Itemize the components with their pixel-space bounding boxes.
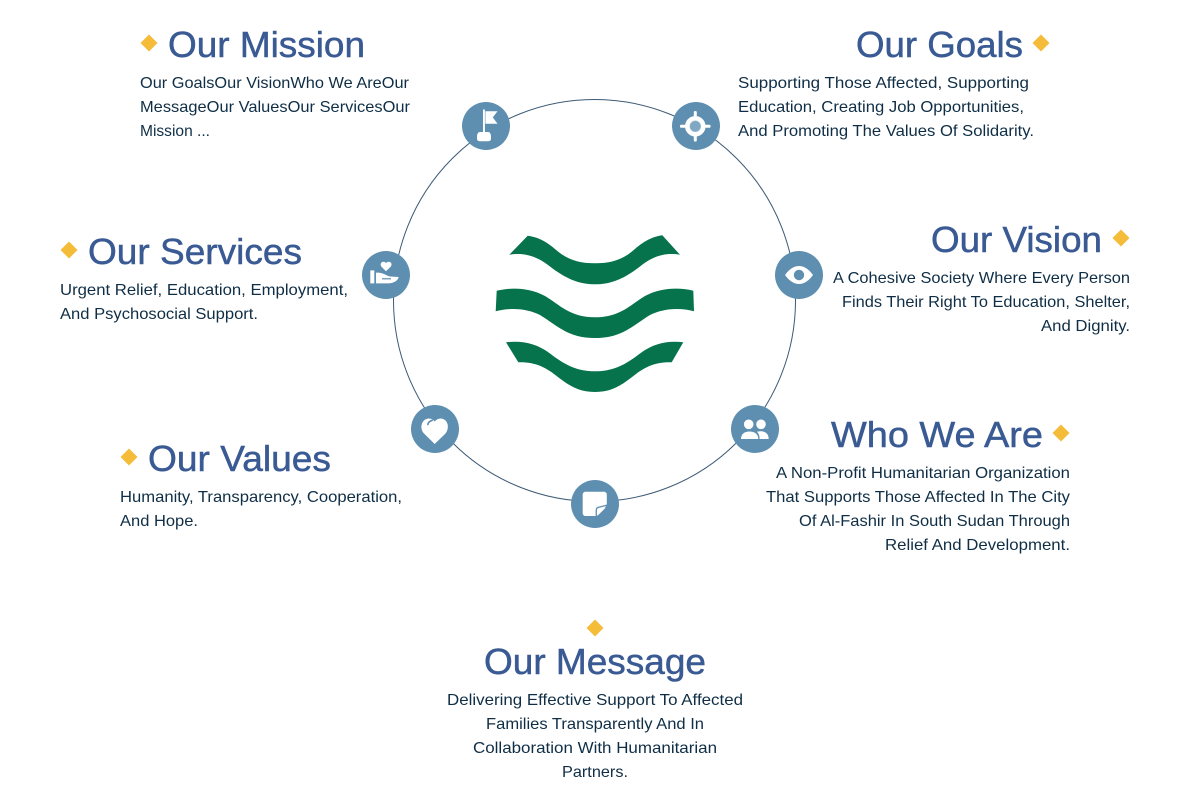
body text: Delivering Effective Support To Affected: [447, 692, 743, 709]
section: our services: [60, 231, 348, 323]
heading: Our Services: [88, 231, 302, 272]
body text: Of Al-Fashir In South Sudan Through: [799, 513, 1070, 530]
body text: And Promoting The Values Of Solidarity.: [738, 123, 1034, 140]
diamond marker: [586, 620, 604, 636]
body text: Partners.: [562, 764, 628, 781]
body text: Supporting Those Affected, Supporting: [738, 75, 1029, 92]
heading: Who We Are: [831, 414, 1043, 455]
body text: Relief And Development.: [885, 537, 1070, 554]
body text: Finds Their Right To Education, Shelter,: [842, 294, 1130, 311]
icon: who we are people: [731, 405, 779, 453]
body text: [120, 489, 402, 530]
diamond marker: [1052, 424, 1070, 442]
body text: [60, 282, 348, 323]
icon: vision eye: [775, 251, 823, 299]
body text: [766, 465, 1070, 554]
body text: And Dignity.: [1041, 318, 1130, 335]
diamond marker: [60, 242, 78, 258]
logo: three green waves: [496, 235, 694, 392]
body text: [140, 75, 411, 140]
diamond marker: [1032, 34, 1050, 52]
body text: Families Transparently And In: [486, 716, 704, 733]
section: who we are: [766, 414, 1070, 554]
body text: Urgent Relief, Education, Employment,: [60, 282, 348, 299]
heading: Our Vision: [931, 219, 1102, 260]
icon: services hand with heart: [362, 251, 410, 299]
body text: Humanity, Transparency, Cooperation,: [120, 489, 402, 506]
body text: Mission ...: [140, 123, 210, 140]
heading: Our Goals: [856, 24, 1023, 65]
body text: [738, 75, 1034, 140]
diamond marker: [140, 34, 158, 52]
diamond marker: [120, 448, 138, 466]
heading: Our Message: [484, 641, 706, 682]
body text: [833, 270, 1130, 335]
body text: Collaboration With Humanitarian: [473, 740, 717, 757]
body text: Education, Creating Job Opportunities,: [738, 99, 1024, 116]
icon: message note: [571, 480, 619, 528]
body text: MessageOur ValuesOur ServicesOur: [140, 99, 411, 116]
body text: And Psychosocial Support.: [60, 306, 258, 323]
icon: goals target: [672, 102, 720, 150]
section: our vision: [833, 219, 1130, 335]
body text: A Cohesive Society Where Every Person: [833, 270, 1130, 287]
section: our goals: [738, 24, 1050, 140]
body text: A Non-Profit Humanitarian Organization: [776, 465, 1070, 482]
section: our mission: [140, 24, 411, 140]
icon: mission flag: [462, 102, 510, 150]
icon: values heart: [411, 405, 459, 453]
body text: [447, 692, 743, 781]
diamond marker: [1112, 230, 1130, 246]
body text: And Hope.: [120, 513, 198, 530]
body text: Our GoalsOur VisionWho We AreOur: [140, 75, 410, 92]
heading: Our Values: [148, 438, 331, 479]
body text: That Supports Those Affected In The City: [766, 489, 1070, 506]
section: our message: [447, 620, 743, 781]
heading: Our Mission: [168, 24, 365, 65]
section: our values: [120, 438, 402, 530]
